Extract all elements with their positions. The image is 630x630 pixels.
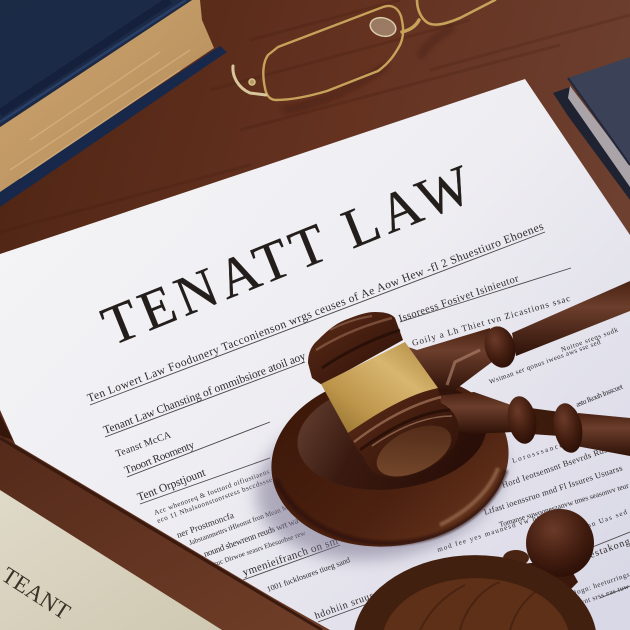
document text lines: Tenant Law Chansting of ommibsiore atoil aoy — [102, 350, 308, 437]
gavel lower handle — [436, 392, 630, 456]
document text lines: Lorosssance tennsan — [511, 429, 600, 465]
gold band — [321, 342, 438, 433]
document text lines: ner Prostmoncfa — [175, 510, 235, 540]
leather folder — [0, 415, 327, 630]
document text lines: Acc whenoreq & Iosttord oifiustiaens a — [153, 465, 277, 517]
document text lines: Tent Orpstjount — [136, 467, 208, 504]
document text lines: Ltfast ioenssruo mnd Fl Issures Usuarss — [483, 463, 624, 517]
document text lines: Nuitoe sreqs sudk — [560, 326, 620, 354]
document text lines: wnt srss eas tuw — [578, 582, 630, 607]
document text lines: Hord Ieotsemsnt Bsevrds Rdsbt — [500, 442, 616, 490]
document text lines: Tomanse suwooneszanvw tmes seasonvv teur — [498, 481, 630, 529]
document text lines: Igovtsu — [594, 419, 629, 438]
gavel upper handle — [402, 281, 630, 392]
second gavel block — [354, 509, 596, 630]
document text lines: 1001 fucklosures tiueg sand — [266, 555, 351, 594]
document text lines: hdohiin sruus — [313, 590, 375, 622]
document text lines: ymenieifranch on sm — [241, 535, 340, 579]
document text lines: astu Ikouh Insscuet — [574, 381, 625, 409]
document text lines — [86, 220, 630, 622]
book: top left — [0, 0, 227, 207]
document title: TENATT LAW — [94, 154, 480, 358]
document text lines: Issoreess Fosivet Isinieutor — [397, 273, 521, 325]
gavel striking end — [348, 388, 459, 478]
document text lines: Ten Lowert Law Foodunery Tacconienson wrgs ceuses of Ae Aow Hew -fl 2 Shuestiuro Ehoenes — [86, 220, 546, 405]
document text lines: Teanst McCA — [114, 429, 173, 460]
document text lines: nound shewrenn reuds wrt wa — [202, 515, 300, 559]
document text lines: Wsiman ser qonus iweos aws sse sed — [488, 338, 602, 386]
document text lines: on Uas sed — [586, 508, 629, 530]
book: top right — [553, 57, 630, 200]
document text lines: Tnoort Roomenty — [123, 439, 197, 477]
document text lines: Goily a Lh Thiet tvn Zicastions ssac — [411, 293, 571, 348]
glasses shadow — [283, 27, 453, 110]
document text lines: eco 11 Nhalsoonstuorstess bsccdsssen — [156, 474, 278, 525]
document text lines: Iogn: heeturrings — [573, 570, 630, 597]
sound block — [261, 360, 519, 560]
document text lines: ruc Dirwoe seasrs Ebesuobse rew — [213, 529, 307, 568]
glasses — [233, 0, 495, 100]
document text lines: mod fee yes maunesd vw hsonse — [436, 508, 558, 554]
document text lines: Jabstannnettrs tHleonst fron Mean Ma — [188, 502, 293, 547]
gavel shadow — [243, 381, 517, 579]
gavel head — [308, 312, 459, 487]
